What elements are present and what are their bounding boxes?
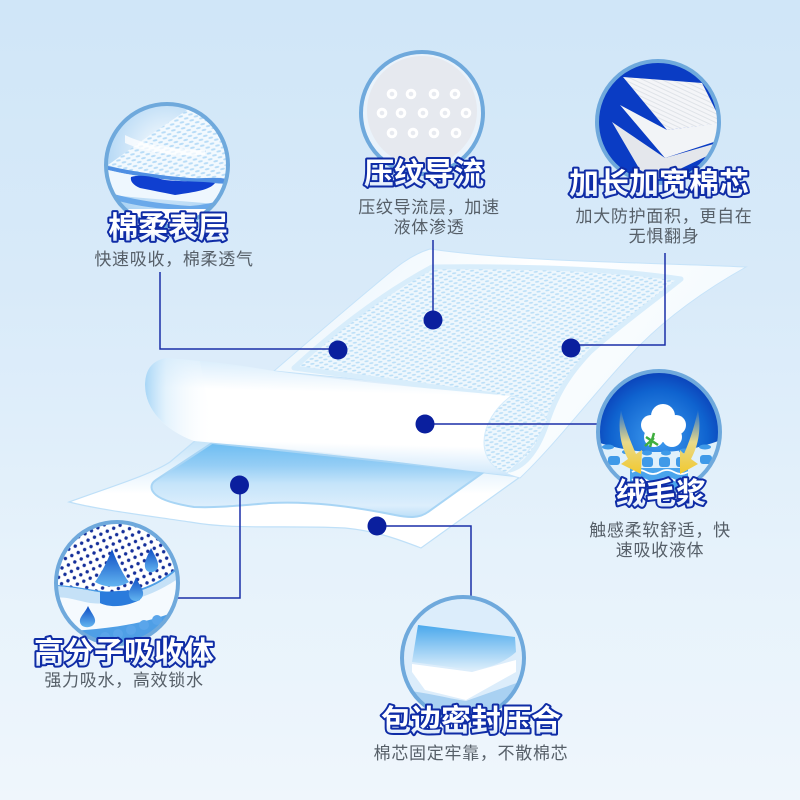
description: 触感柔软舒适，快 <box>589 521 731 540</box>
description: 无惧翻身 <box>629 227 699 246</box>
product: rolled absorbent pad <box>69 249 746 548</box>
heading: 高分子吸收体 <box>34 637 214 670</box>
upper sheet <box>274 249 746 478</box>
description: 加大防护面积，更自在 <box>576 207 752 226</box>
icon: stacked core layers <box>596 60 722 184</box>
heading: 绒毛浆 <box>616 478 706 511</box>
heading: 压纹导流 <box>364 158 484 191</box>
roll body <box>145 358 515 476</box>
absorbent core <box>152 443 484 517</box>
description: 快速吸收，棉柔透气 <box>94 250 254 269</box>
roll opening <box>484 396 548 473</box>
panel: cotton soft surface <box>94 103 254 269</box>
icon: soft surface layers <box>105 103 230 233</box>
description: 速吸收液体 <box>616 541 704 560</box>
description <box>576 207 752 246</box>
embossed mesh area <box>294 267 681 470</box>
panel: sealed edge <box>374 596 568 763</box>
icon: cotton and arrows <box>597 370 721 494</box>
lower sheet <box>69 440 520 548</box>
icon: sealed edge layers <box>401 596 525 720</box>
panel: super absorbent polymer <box>34 521 214 690</box>
description: 液体渗透 <box>394 218 464 237</box>
panel: longer and wider core <box>569 60 752 246</box>
heading: 加长加宽棉芯 <box>569 168 749 201</box>
icon: embossed holes <box>361 52 483 174</box>
icon: absorbent beads and drops <box>55 521 179 645</box>
heading: 棉柔表层 <box>108 212 228 245</box>
panel: fluff pulp <box>589 370 731 560</box>
description <box>358 198 500 237</box>
description: 压纹导流层，加速 <box>358 198 500 217</box>
description: 强力吸水，高效锁水 <box>44 671 204 690</box>
heading: 包边密封压合 <box>381 705 561 738</box>
panel: embossed flow guide <box>358 52 500 237</box>
description: 棉芯固定牢靠，不散棉芯 <box>374 744 568 763</box>
description <box>589 521 731 560</box>
leader lines and markers <box>160 240 665 600</box>
